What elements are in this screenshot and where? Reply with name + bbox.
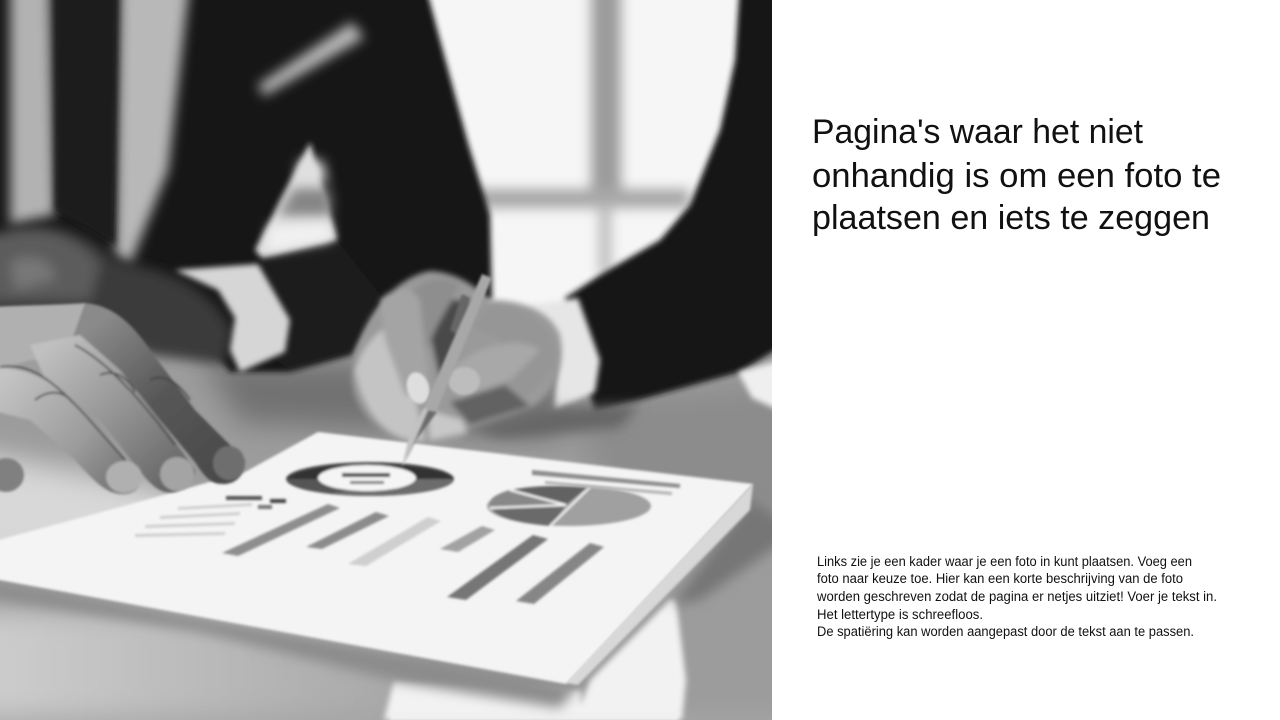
title: Pagina's waar het niet — [812, 113, 1144, 151]
suit jacket left person — [0, 0, 492, 372]
sheet body — [0, 432, 753, 684]
right hand holding pen — [352, 271, 562, 446]
donut chart — [286, 462, 454, 496]
finger nails right hand — [403, 367, 480, 406]
back of the hand — [0, 302, 86, 367]
description text — [816, 554, 1217, 639]
floor of table below sheet — [0, 610, 410, 720]
white object at right edge — [735, 359, 772, 412]
pocket square — [258, 22, 364, 96]
gap between arm and body — [254, 144, 338, 260]
blurred forearm and background hand — [0, 226, 232, 365]
description text: Het lettertype is schreefloos. — [817, 607, 983, 622]
description text: foto naar keuze toe. Hier kan een korte beschrijving van de foto — [817, 571, 1183, 586]
finger three — [0, 368, 140, 494]
right sleeve — [561, 0, 772, 412]
paper shadow right — [670, 502, 772, 610]
pen — [402, 274, 492, 467]
legend on sheet — [135, 496, 286, 537]
right shirt cuff — [525, 298, 600, 410]
description text: worden geschreven zodat de pagina er netjes uitziet! Voer je tekst in. — [816, 589, 1217, 604]
title — [812, 113, 1221, 237]
table surface — [0, 350, 820, 720]
window seen through arm gap — [266, 160, 332, 252]
shirt and tie — [10, 0, 190, 265]
hand shadow on table — [470, 404, 640, 438]
finger one — [70, 303, 245, 484]
title: onhandig is om een foto te — [812, 157, 1221, 195]
white objects below sheet — [384, 600, 686, 720]
sheet shadow — [0, 578, 590, 708]
left hand on paper — [0, 303, 245, 494]
description text: De spatiëring kan worden aangepast door de tekst aan te passen. — [817, 624, 1194, 639]
finger two — [30, 335, 195, 493]
title: plaatsen en iets te zeggen — [812, 199, 1210, 237]
window background — [426, 0, 742, 309]
bar chart — [222, 504, 604, 604]
sheet edge — [566, 484, 753, 685]
small finger edge — [0, 458, 24, 492]
pie chart — [487, 486, 651, 526]
description text: Links zie je een kader waar je een foto in kunt plaatsen. Voeg een — [817, 554, 1192, 569]
finger creases — [0, 345, 190, 460]
photo: business people analysing charts — [0, 0, 820, 720]
finger nails left hand — [213, 446, 245, 480]
tie — [55, 0, 118, 245]
left shirt cuff — [175, 264, 290, 372]
printed report sheet — [0, 432, 800, 720]
bottom edge of white objects — [390, 716, 678, 720]
chart caption on sheet — [532, 470, 680, 495]
